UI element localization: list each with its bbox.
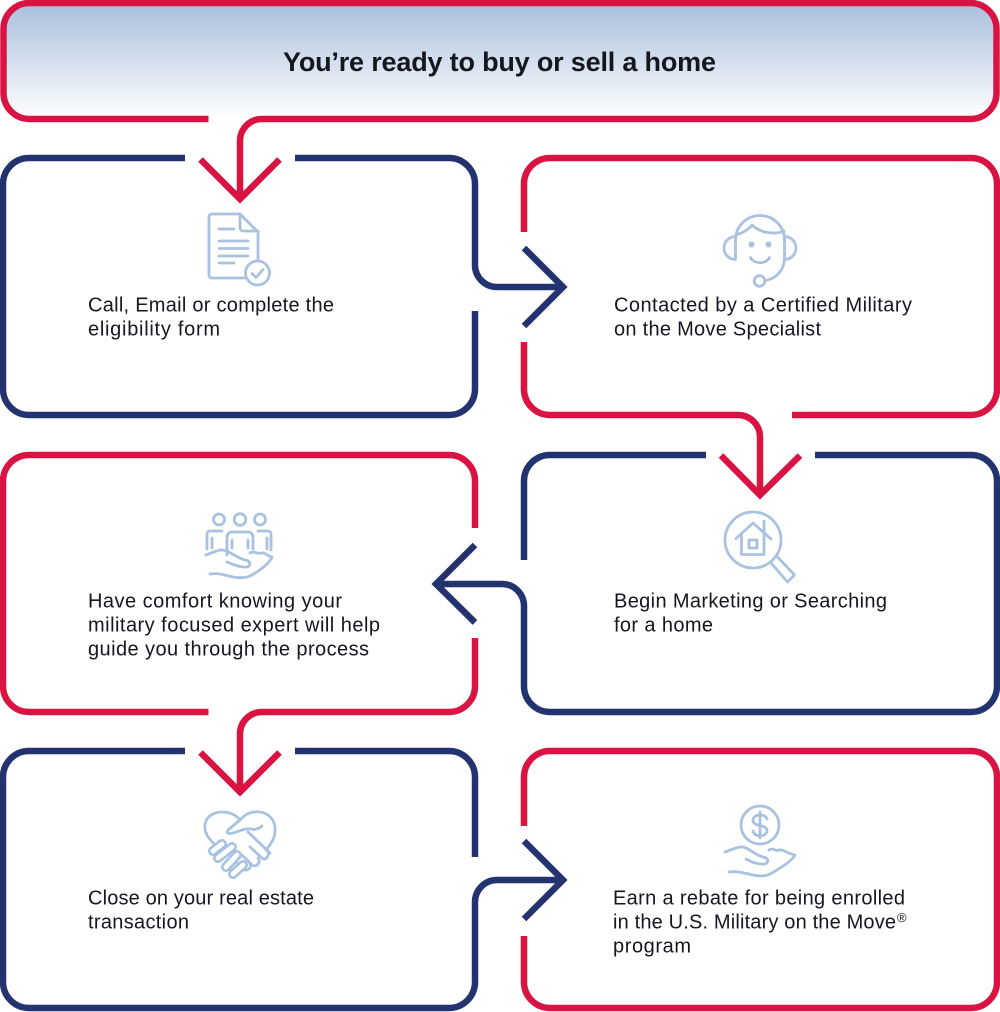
icon: dollar coin over hand [725,806,795,876]
icon: team on open hand [206,514,272,578]
arrow: step 4 to step 5 [200,752,280,792]
text: step 6: Earn a rebate for being enrolled [613,888,905,910]
text: step 6 [613,888,907,958]
text: step 5 [88,888,314,934]
text: step 4 [88,590,380,660]
icon: handshake heart [205,812,275,874]
panel: step 6 rebate [524,751,997,1008]
panel: step 2 specialist [524,158,997,494]
text: step 4: Have comfort knowing your [88,590,342,612]
text: step 3 [614,590,887,636]
text: step 3: Begin Marketing or Searching [614,590,887,612]
text: step 6: in the U.S. Military on the Move [613,912,896,934]
icon: headset agent [724,216,796,286]
text: step 2: on the Move Specialist [614,318,821,340]
heading: start banner: You’re ready to buy or sell a home [283,47,716,77]
icon: document with check [209,214,270,285]
text: step 1 [88,294,334,340]
arrow: banner to step 1 [200,160,280,199]
arrow: step 1 to step 2 [524,248,563,326]
panel: step 1 eligibility [3,158,563,415]
text: step 6: program [613,936,691,958]
panel: start banner [4,3,996,197]
text: step 5: Close on your real estate [88,888,314,910]
text: step 4: military focused expert will help [88,614,380,636]
icon: magnifier with house [725,512,794,582]
text: step 5: transaction [88,912,189,934]
text: step 4: guide you through the process [88,638,369,660]
text: step 2: Contacted by a Certified Military [614,294,912,316]
text: step 1: Call, Email or complete the [88,294,334,316]
text: step 1: eligibility form [88,318,220,340]
text: step 2 [614,294,912,340]
arrow: step 5 to step 6 [524,841,563,919]
arrow: step 2 to step 3 [721,456,800,495]
panel: step 5 closing [3,751,563,1008]
text: step 6: ® [897,910,907,925]
arrow: step 3 to step 4 [436,545,475,622]
panel: step 3 marketing or searching [438,455,997,712]
panel: step 4 expert guidance [3,455,475,790]
text: step 3: for a home [614,614,713,636]
